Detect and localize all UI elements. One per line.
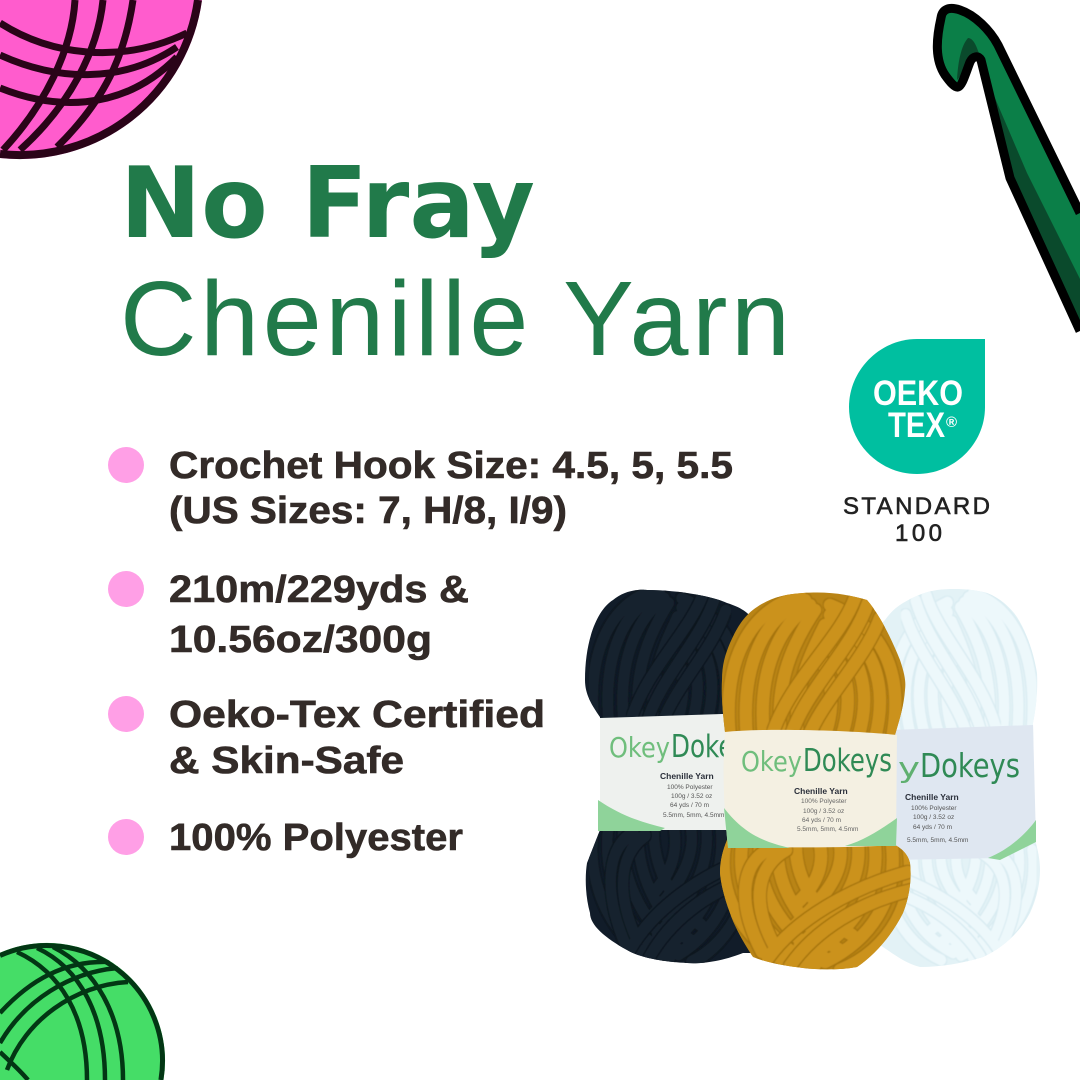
icon: crochet hook: [937, 8, 1080, 331]
bullet: certification: & Skin-Safe: [169, 740, 404, 782]
title line: Chenille Yarn: Chenille Yarn: [120, 260, 790, 378]
bullet: length and weight: [108, 569, 469, 661]
label: white skein: [890, 725, 1036, 860]
label: white skein: y: [898, 751, 920, 784]
bullet: length and weight: 10.56oz/300g: [169, 619, 432, 661]
badge caption: 100: [895, 520, 942, 547]
label: navy skein: 5.5mm, 5mm, 4.5mm: [663, 812, 724, 819]
bullet: certification: [108, 694, 545, 782]
icon: teal drop: [849, 339, 985, 474]
label: white skein: 64 yds / 70 m: [913, 824, 952, 831]
feature list: [108, 445, 733, 859]
bullet: length and weight: 210m/229yds &: [169, 569, 469, 611]
badge caption: [843, 493, 990, 547]
label: white skein: 100% Polyester: [911, 805, 957, 812]
yarn skein: white: [875, 585, 1045, 970]
title: [120, 147, 790, 378]
icon: teal drop: OEKO: [873, 374, 963, 413]
bullet: certification: Oeko-Tex Certified: [169, 694, 545, 736]
yarn skein: navy: [585, 590, 750, 964]
icon: teal drop: ®: [946, 414, 957, 431]
icon: teal drop: TEX: [888, 406, 946, 445]
label: white skein: 100g / 3.52 oz: [913, 814, 954, 821]
icon: green yarn ball: [0, 943, 165, 1080]
label: white skein: 5.5mm, 5mm, 4.5mm: [907, 837, 968, 844]
bullet: hook size: [108, 445, 733, 532]
label: mustard skein: 100% Polyester: [801, 798, 847, 805]
label: mustard skein: Chenille Yarn: [794, 786, 848, 796]
product photo: three yarn skeins: [580, 585, 1045, 975]
label: mustard skein: 100g / 3.52 oz: [803, 808, 844, 815]
bullet: material: 100% Polyester: [169, 817, 463, 859]
label: navy skein: Dokeys: [671, 729, 761, 765]
label: navy skein: 100g / 3.52 oz: [671, 793, 712, 800]
bullet: hook size: (US Sizes: 7, H/8, I/9): [169, 490, 567, 532]
bullet: hook size: Crochet Hook Size: 4.5, 5, 5.5: [169, 445, 733, 487]
label: mustard skein: Okey: [741, 745, 802, 778]
label: navy skein: 64 yds / 70 m: [670, 802, 709, 809]
label: mustard skein: 64 yds / 70 m: [802, 817, 841, 824]
label: navy skein: 100% Polyester: [667, 784, 713, 791]
yarn skein: mustard: [720, 592, 911, 970]
label: navy skein: Okey: [609, 731, 670, 764]
badge: OEKO-TEX Standard 100: [843, 339, 990, 547]
label: mustard skein: 5.5mm, 5mm, 4.5mm: [797, 826, 858, 833]
label: navy skein: Chenille Yarn: [660, 771, 714, 781]
label: mustard skein: Dokeys: [803, 743, 892, 779]
label: mustard skein: [724, 730, 897, 848]
title line: No Fray: No Fray: [120, 147, 535, 261]
label: navy skein: [598, 713, 761, 831]
icon: pink yarn ball: [0, 0, 202, 159]
label: white skein: Chenille Yarn: [905, 792, 959, 802]
badge caption: STANDARD: [843, 493, 990, 520]
label: white skein: Dokeys: [920, 746, 1020, 785]
